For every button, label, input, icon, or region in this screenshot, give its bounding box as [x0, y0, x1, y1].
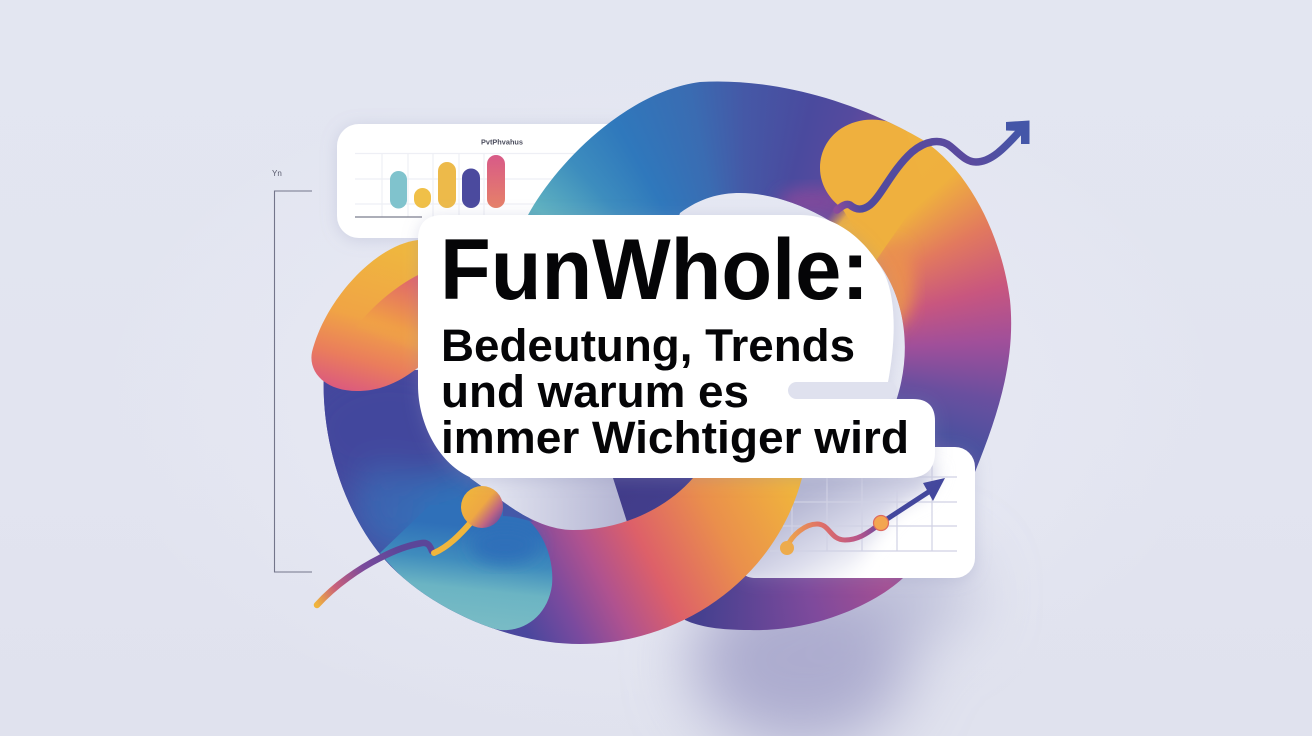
grid	[355, 153, 600, 217]
title: FunWhole:	[440, 222, 869, 318]
ball	[461, 486, 503, 528]
yellow stick	[434, 521, 472, 553]
orange leaf blob	[311, 240, 420, 391]
large gradient ring	[528, 82, 1012, 630]
bracket axis	[272, 169, 312, 572]
bars	[390, 155, 505, 208]
end dot	[874, 516, 888, 530]
trend arrow	[837, 120, 1030, 210]
arrow	[881, 478, 945, 523]
chart axis	[355, 216, 422, 218]
panel: line chart card	[735, 447, 975, 585]
arrowhead	[1006, 120, 1030, 144]
drop shadow under rings	[690, 545, 975, 736]
axis label: Yn	[272, 169, 282, 178]
subtitle line 1: Bedeutung, Trends	[441, 320, 855, 371]
grid	[770, 450, 957, 551]
trend line	[787, 524, 880, 547]
left curved line	[317, 486, 503, 605]
orange blob on ring	[820, 120, 906, 260]
blue highlight	[471, 527, 539, 563]
pill	[788, 382, 897, 399]
crescent swoosh	[324, 370, 802, 644]
title panel	[418, 215, 935, 478]
start dot	[780, 541, 794, 555]
inner leaf	[355, 274, 420, 360]
panel: bar chart card	[337, 124, 637, 238]
blue part of swoosh	[324, 370, 507, 568]
chart title: PvtPhvahus	[481, 140, 523, 146]
shaded gap below title	[470, 470, 640, 535]
shoulder	[503, 503, 533, 522]
card shading	[735, 470, 940, 585]
subtitle line 2: und warum es	[441, 366, 749, 417]
teal blob	[380, 504, 552, 630]
subtitle line 3: immer Wichtiger wird	[441, 412, 909, 463]
